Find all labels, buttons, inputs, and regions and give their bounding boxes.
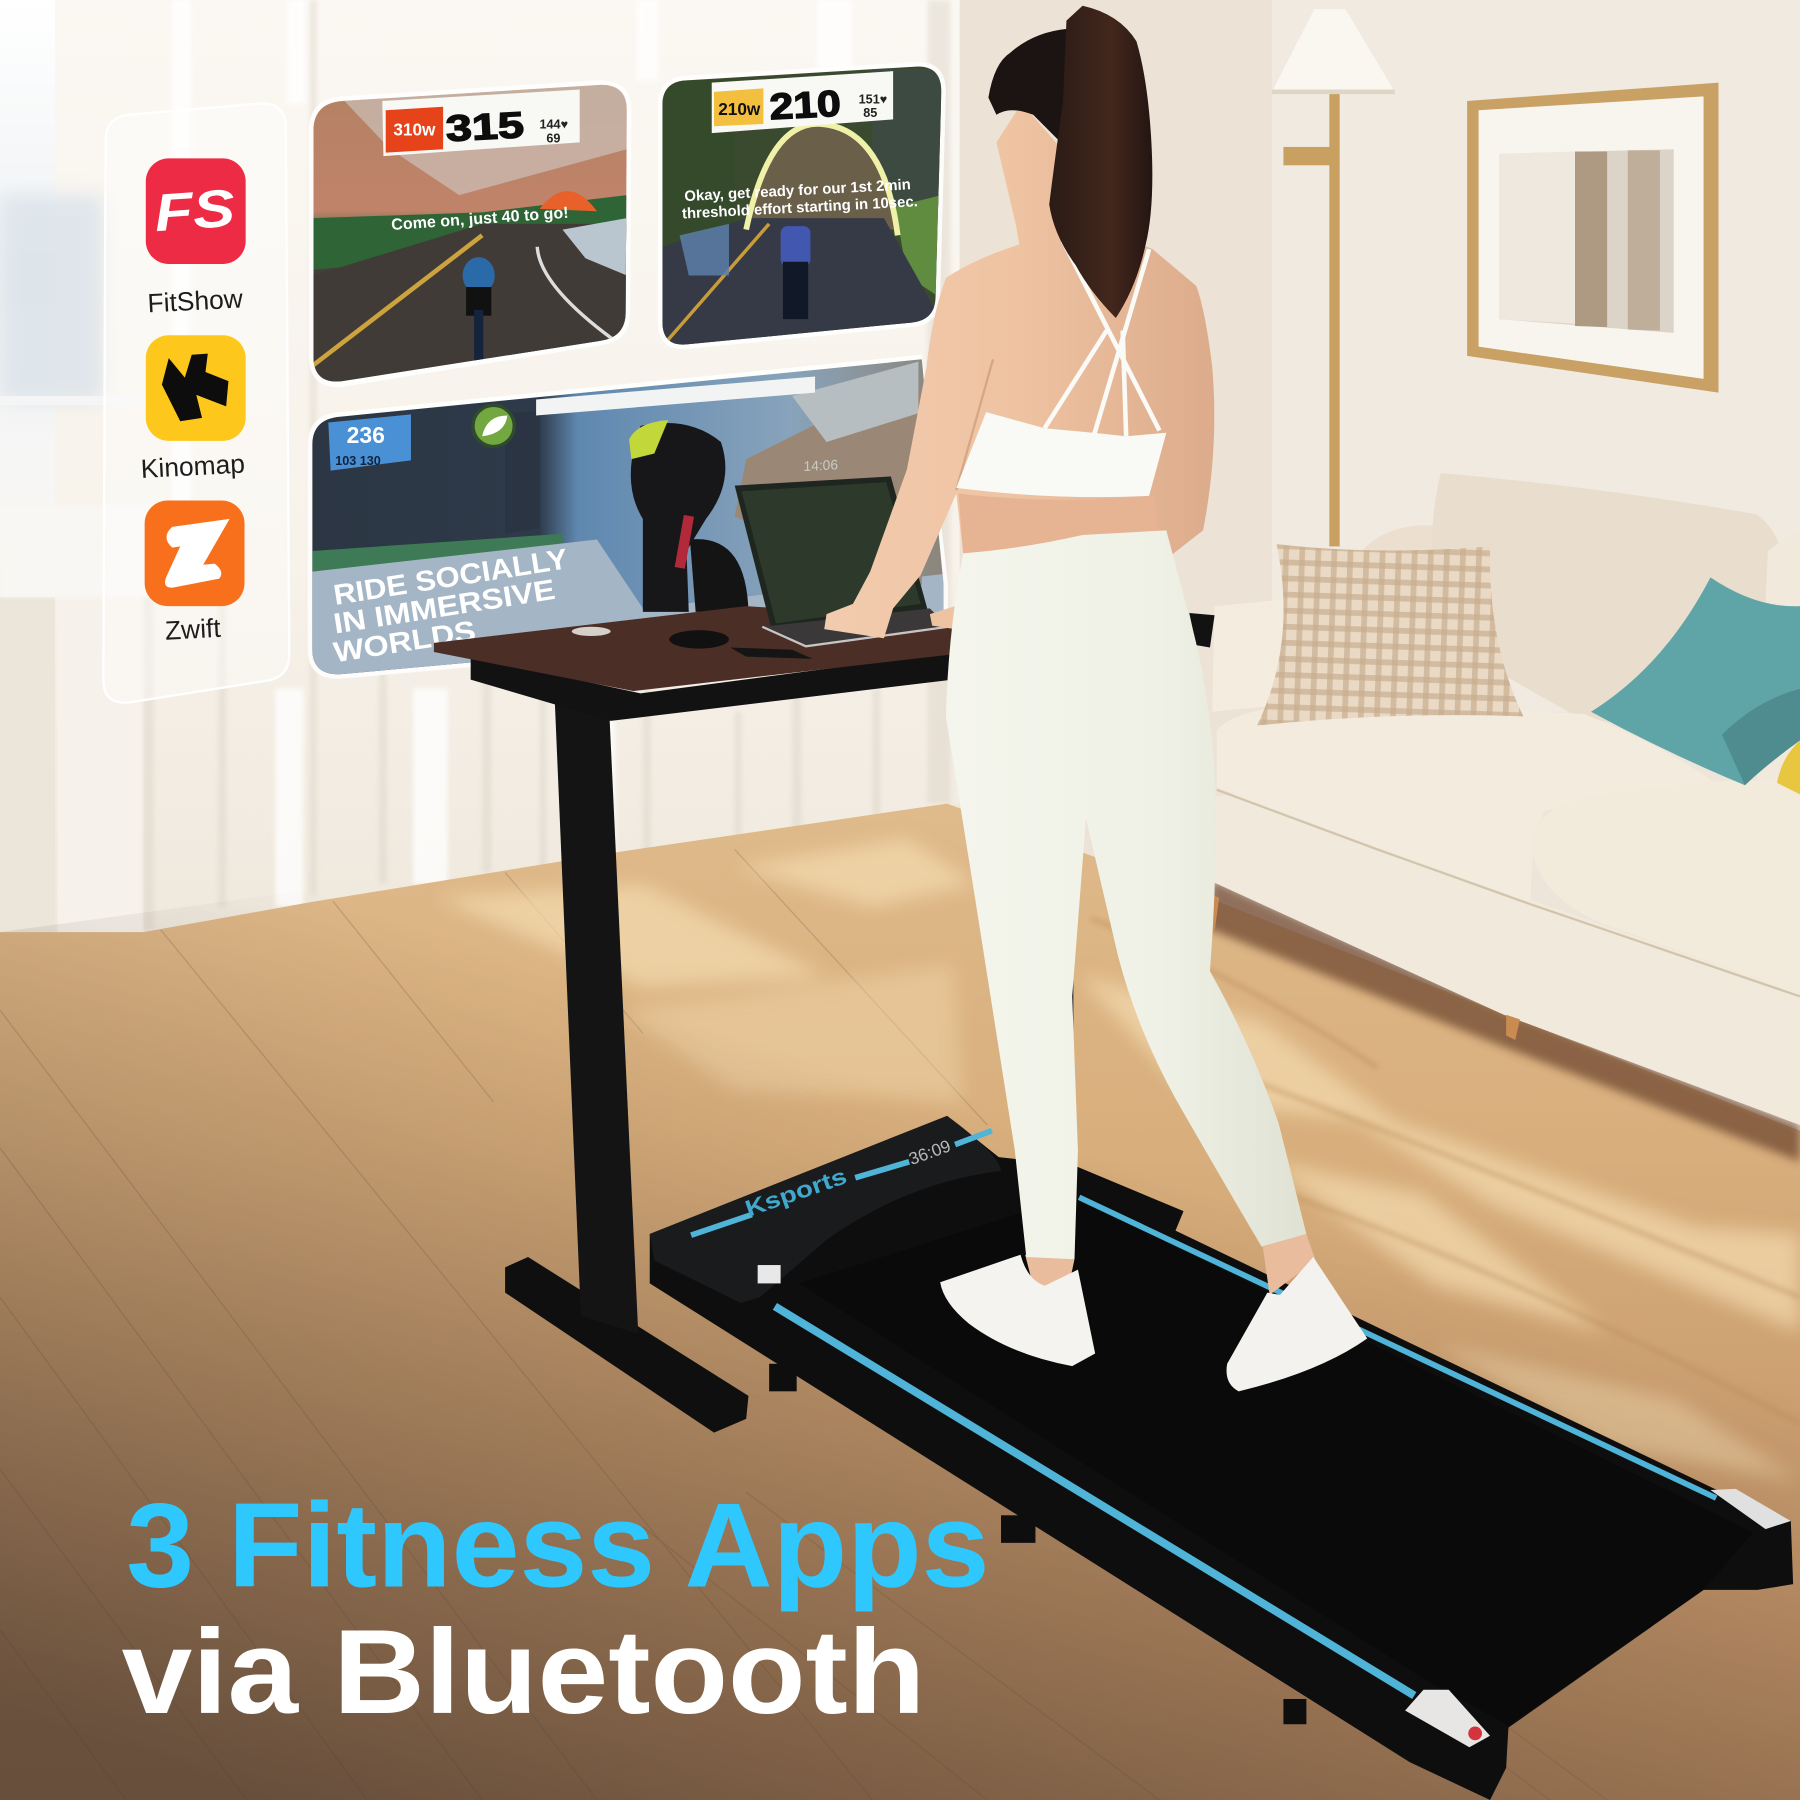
sports top <box>956 241 1166 497</box>
workout data bar: 210 <box>769 83 842 127</box>
yellow pillow corner <box>1777 740 1800 794</box>
arms and torso <box>824 103 1214 638</box>
screen slogan: IN IMMERSIVE <box>331 574 557 641</box>
left shoe <box>940 1255 1095 1366</box>
workout data bar: 210w <box>718 99 761 119</box>
workout data bar <box>712 71 893 133</box>
display: 36:09 <box>906 1135 953 1169</box>
caption: Come on, just 40 to go! <box>391 204 569 234</box>
teal pillow <box>1591 577 1800 785</box>
floor lamp <box>1272 9 1395 546</box>
top data strip <box>536 377 815 416</box>
sofa <box>1205 473 1800 1162</box>
curtains <box>0 0 960 932</box>
laptop <box>735 457 948 646</box>
label: FitShow: FitShow <box>147 283 244 318</box>
screen: immersive worlds <box>308 355 951 683</box>
QR code <box>758 1265 781 1283</box>
icon: feather badge <box>473 405 514 447</box>
icon: FitShow: FS <box>153 179 237 243</box>
workout data bar: 144♥ <box>540 118 568 132</box>
window glow <box>0 0 189 608</box>
wall <box>0 0 1800 1148</box>
screen slogan: RIDE SOCIALLY <box>331 543 570 612</box>
blue strips <box>691 1131 1716 1696</box>
standing desk <box>434 606 1215 1433</box>
icon: Zwift <box>145 501 245 606</box>
person <box>824 6 1367 1391</box>
belt <box>799 1196 1753 1725</box>
screen slogan: WORLDS <box>331 615 478 669</box>
workout data bar: 315 <box>445 104 525 149</box>
power readout <box>328 414 411 471</box>
floor <box>0 804 1800 1800</box>
caption: Okay, get ready for our 1st 2min <box>684 176 911 205</box>
picture frame <box>1467 83 1718 393</box>
inner wall <box>960 0 1274 895</box>
workout data bar: 85 <box>863 106 877 120</box>
workout data bar: 69 <box>546 131 560 145</box>
right wall <box>1272 0 1800 712</box>
screen slogan <box>332 548 566 662</box>
power readout: 103 130 <box>335 454 381 468</box>
app panel <box>103 103 289 703</box>
workout data bar: 151♥ <box>859 92 887 106</box>
treadmill foot pads <box>769 1364 1306 1724</box>
icon: FitShow <box>146 158 246 264</box>
warning label right <box>1710 1489 1791 1529</box>
legs skin and ankles <box>1025 1234 1316 1295</box>
window sill and outside view <box>0 195 172 597</box>
headline line two: via Bluetooth <box>122 1606 925 1739</box>
leggings <box>946 530 1306 1259</box>
caption: threshold effort starting in 10sec. <box>682 193 918 223</box>
brand: Ksports <box>742 1163 850 1222</box>
icon: Kinomap <box>146 335 246 441</box>
treadmill <box>650 1116 1793 1800</box>
screen: tunnel <box>658 62 946 350</box>
caption <box>682 178 917 218</box>
right shoe <box>1227 1257 1367 1391</box>
plaid pillow <box>1257 544 1523 726</box>
hair <box>988 6 1152 318</box>
motor cover <box>650 1116 1001 1303</box>
label: Kinomap: Kinomap <box>140 449 246 484</box>
label: Zwift: Zwift <box>164 613 222 646</box>
treadmill body <box>650 1116 1793 1800</box>
warning label bottom <box>1405 1690 1490 1747</box>
power readout: 236 <box>347 422 385 448</box>
workout data bar: 310w <box>393 119 436 139</box>
title <box>122 1479 990 1739</box>
desk mouse pad and remote <box>572 627 813 659</box>
workout data bar <box>382 90 580 156</box>
screen: desert road <box>309 80 631 390</box>
cyclist <box>629 420 748 612</box>
laptop: 14:06 <box>804 457 838 474</box>
headline line one: 3 Fitness Apps <box>126 1479 990 1612</box>
